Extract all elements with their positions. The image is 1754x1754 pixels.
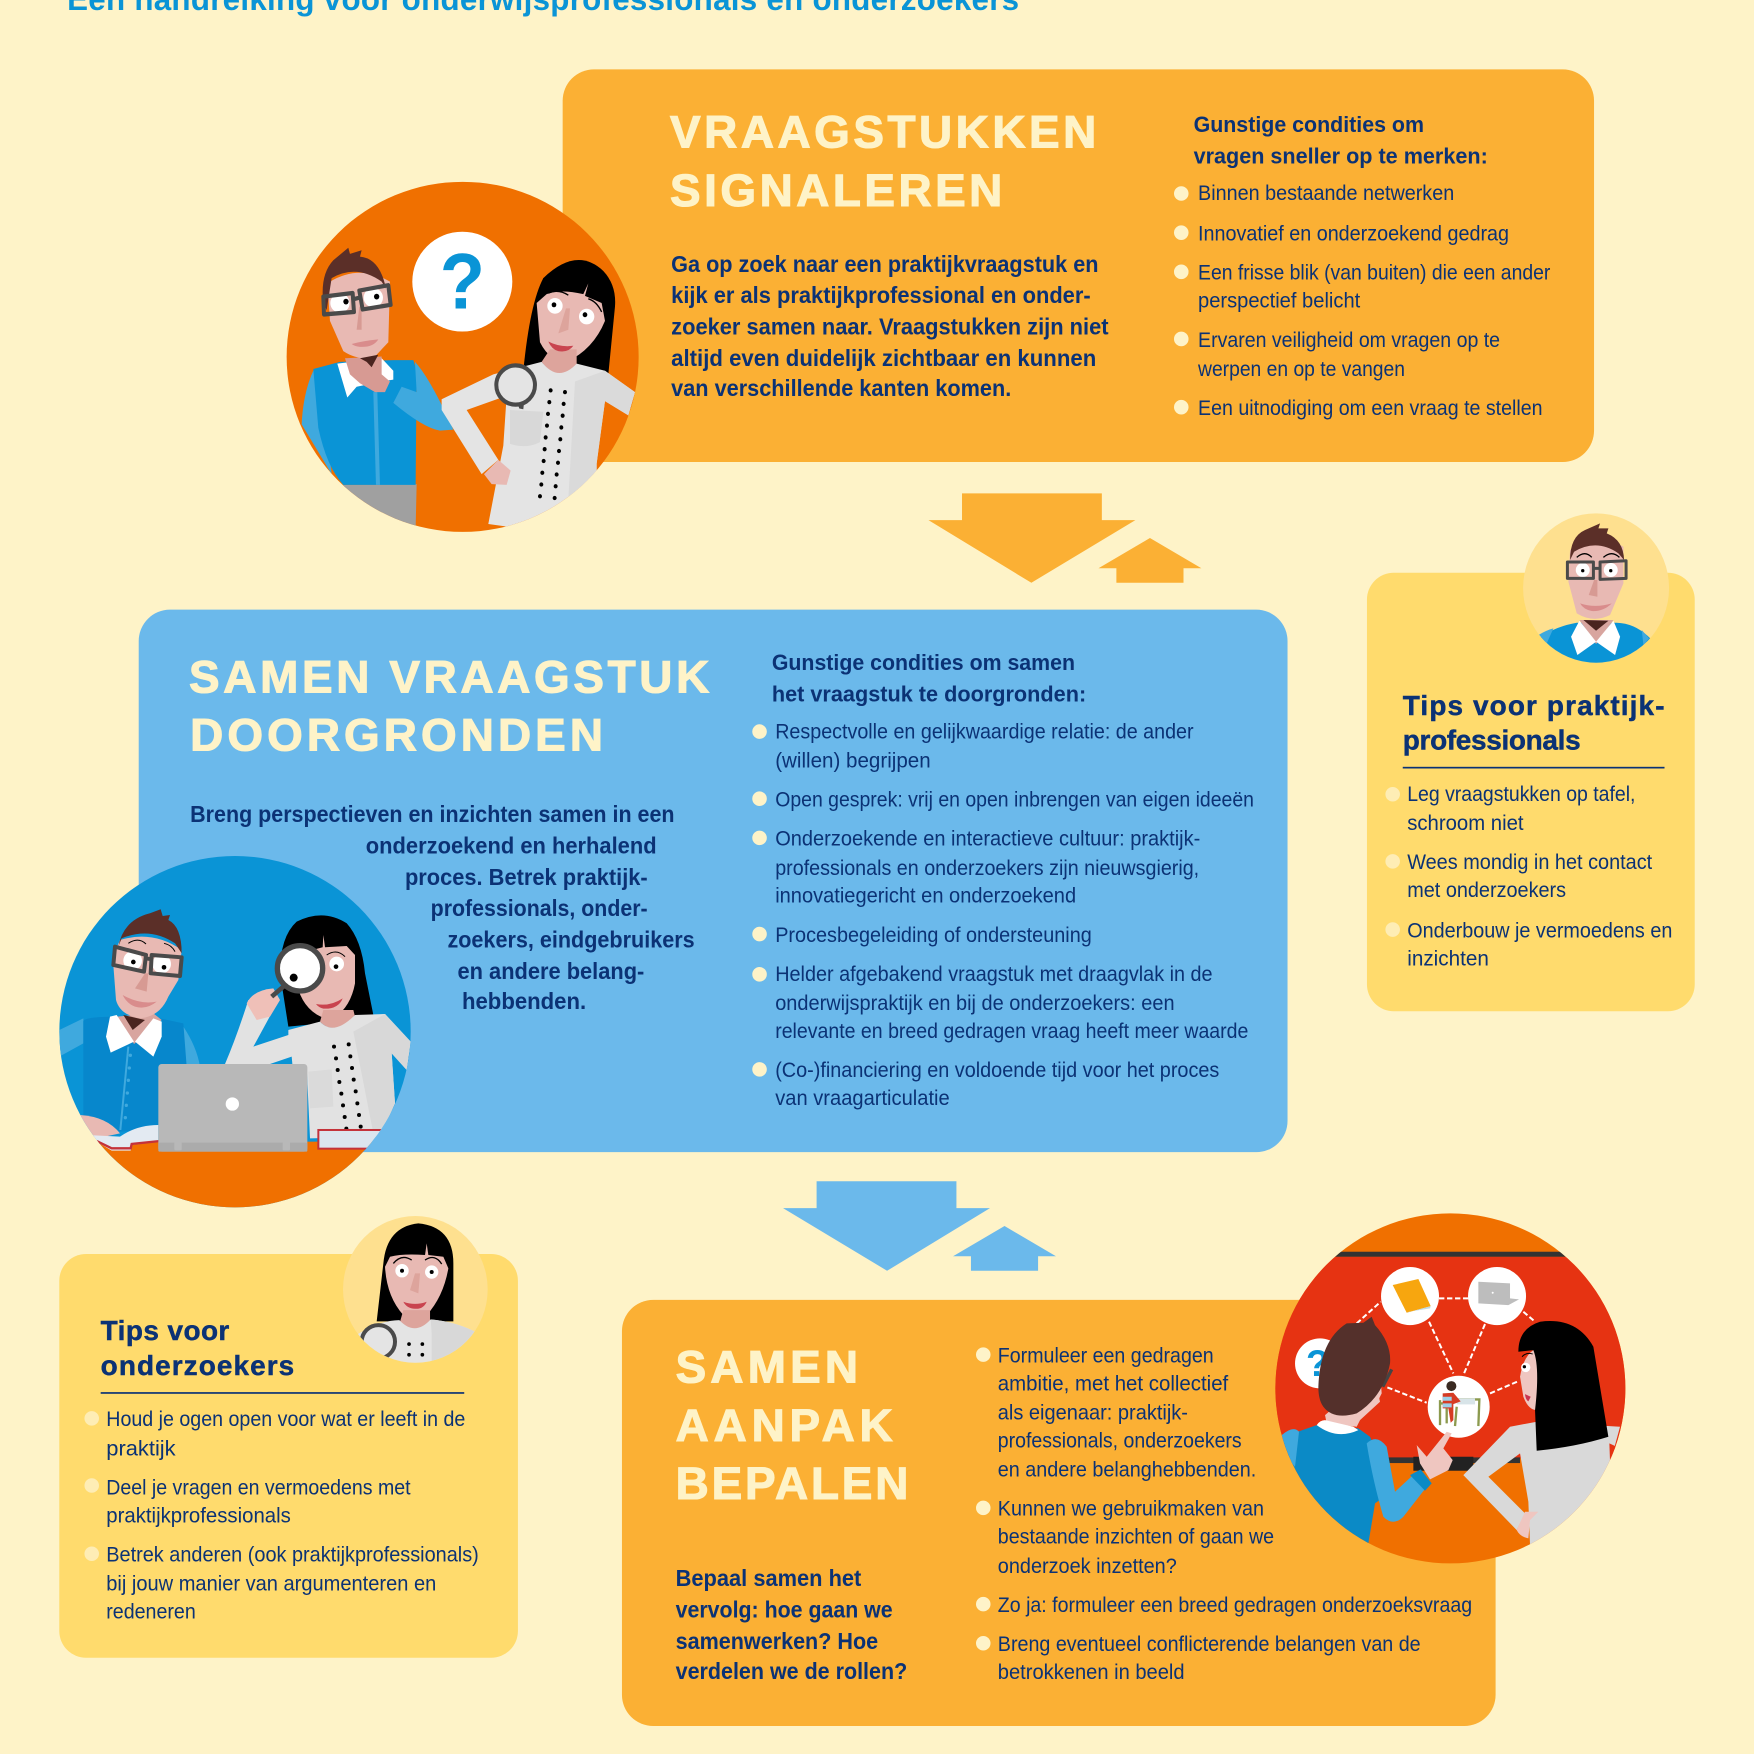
heading: onderzoekers xyxy=(101,1350,294,1381)
intro text xyxy=(671,251,1109,401)
icon: man portrait xyxy=(1523,513,1669,667)
tips list: redeneren xyxy=(106,1600,196,1624)
conditions list: relevante en breed gedragen vraag heeft meer waarde xyxy=(775,1019,1248,1043)
conditions list: onderzoek inzetten? xyxy=(998,1554,1177,1578)
arrow: orange down and up xyxy=(928,493,1201,583)
panel: tips voor onderzoekers xyxy=(59,1254,518,1658)
intro text: altijd even duidelijk zichtbaar en kunnen xyxy=(671,345,1096,371)
conditions list: Respectvolle en gelijkwaardige relatie: de ander xyxy=(775,719,1194,743)
tips list: Wees mondig in het contact xyxy=(1407,850,1652,874)
illustration: man and woman at laptop xyxy=(57,853,413,1212)
arrow: blue down and up xyxy=(783,1181,1056,1271)
conditions list: bestaande inzichten of gaan we xyxy=(998,1525,1274,1549)
conditions list: Helder afgebakend vraagstuk met draagvlak in de xyxy=(775,962,1213,986)
conditions list: (Co-)financiering en voldoende tijd voor het proces xyxy=(775,1058,1219,1082)
panel background xyxy=(563,69,1594,462)
intro text: Bepaal samen het xyxy=(676,1565,862,1591)
conditions list: als eigenaar: praktijk- xyxy=(998,1401,1188,1425)
illustration: man and woman with question: ? xyxy=(440,238,485,326)
conditions list xyxy=(976,1343,1472,1684)
heading xyxy=(1403,690,1665,755)
tips list: schroom niet xyxy=(1407,811,1524,835)
panel: tips voor praktijkprofessionals xyxy=(1367,573,1695,1011)
conditions list: (willen) begrijpen xyxy=(775,748,931,772)
conditions list: Een uitnodiging om een vraag te stellen xyxy=(1198,396,1543,420)
intro text: Breng perspectieven en inzichten samen in een xyxy=(190,801,675,827)
illustration: two people at whiteboard xyxy=(1273,1210,1630,1567)
intro text: vervolg: hoe gaan we xyxy=(676,1597,893,1623)
conditions list: Open gesprek: vrij en open inbrengen van eigen ideeën xyxy=(775,788,1254,812)
tips list: Houd je ogen open voor wat er leeft in de xyxy=(106,1407,465,1431)
tips list: met onderzoekers xyxy=(1407,878,1566,902)
intro text: kijk er als praktijkprofessional en onder- xyxy=(671,282,1091,308)
panel background xyxy=(1367,573,1695,1011)
conditions heading: Gunstige condities om samen xyxy=(772,650,1075,675)
tips list: inzichten xyxy=(1407,946,1489,970)
conditions list: professionals, onderzoekers xyxy=(998,1428,1242,1452)
conditions list: en andere belanghebbenden. xyxy=(998,1458,1256,1482)
tips list: bij jouw manier van argumenteren en xyxy=(106,1572,436,1596)
panel background xyxy=(139,610,1288,1152)
intro text: samenwerken? Hoe xyxy=(676,1628,878,1654)
illustration: two people at whiteboard: ? xyxy=(1306,1342,1329,1384)
conditions heading: vragen sneller op te merken: xyxy=(1194,143,1488,168)
intro text: en andere belang- xyxy=(458,958,644,984)
intro text: zoekers, eindgebruikers xyxy=(447,926,695,952)
tips list: Onderbouw je vermoedens en xyxy=(1407,918,1672,942)
conditions list: betrokkenen in beeld xyxy=(998,1660,1185,1684)
heading: BEPALEN xyxy=(676,1457,908,1509)
conditions heading xyxy=(1194,112,1488,168)
panel: vraagstukken signaleren xyxy=(563,69,1594,462)
conditions list: Een frisse blik (van buiten) die een ander xyxy=(1198,261,1550,285)
tips list: praktijk xyxy=(106,1436,176,1460)
intro text: verdelen we de rollen? xyxy=(676,1658,907,1684)
heading xyxy=(676,1341,908,1509)
conditions list: van vraagarticulatie xyxy=(775,1086,950,1110)
tips list xyxy=(84,1407,479,1624)
conditions list: innovatiegericht en onderzoekend xyxy=(775,884,1076,908)
panel background xyxy=(622,1300,1496,1726)
conditions heading: Gunstige condities om xyxy=(1194,112,1424,137)
intro text xyxy=(190,801,695,1014)
heading xyxy=(189,650,709,761)
heading: SAMEN xyxy=(676,1341,858,1393)
heading: DOORGRONDEN xyxy=(190,709,603,761)
conditions list: Kunnen we gebruikmaken van xyxy=(998,1497,1264,1521)
conditions list: ambitie, met het collectief xyxy=(998,1371,1228,1395)
conditions list: Zo ja: formuleer een breed gedragen onderzoeksvraag xyxy=(998,1593,1472,1617)
panel: samen vraagstuk doorgronden xyxy=(139,610,1288,1152)
heading: SIGNALEREN xyxy=(670,164,1002,216)
intro text: proces. Betrek praktijk- xyxy=(405,864,648,890)
conditions heading: het vraagstuk te doorgronden: xyxy=(772,681,1086,706)
illustration: man and woman with question xyxy=(280,175,647,538)
heading xyxy=(670,106,1096,216)
conditions list: Onderzoekende en interactieve cultuur: praktijk- xyxy=(775,827,1200,851)
heading: VRAAGSTUKKEN xyxy=(670,106,1096,158)
conditions list: Binnen bestaande netwerken xyxy=(1198,181,1454,205)
tips list: Betrek anderen (ook praktijkprofessionals) xyxy=(106,1543,479,1567)
heading xyxy=(101,1315,294,1381)
panel: samen aanpak bepalen xyxy=(622,1300,1496,1726)
intro text xyxy=(676,1565,907,1684)
heading: professionals xyxy=(1403,724,1581,755)
intro text: zoeker samen naar. Vraagstukken zijn niet xyxy=(671,313,1109,339)
tips list: Deel je vragen en vermoedens met xyxy=(106,1475,411,1499)
intro text: onderzoekend en herhalend xyxy=(366,833,657,859)
tips list xyxy=(1385,782,1672,970)
heading: Tips voor xyxy=(101,1315,229,1346)
icon: woman portrait xyxy=(343,1216,488,1367)
conditions list xyxy=(1174,181,1550,420)
conditions list: perspectief belicht xyxy=(1198,289,1360,313)
tips list: Leg vraagstukken op tafel, xyxy=(1407,782,1635,806)
conditions list: onderwijspraktijk en bij de onderzoekers: een xyxy=(775,991,1175,1015)
conditions list: Formuleer een gedragen xyxy=(998,1343,1214,1367)
conditions list xyxy=(752,719,1254,1110)
heading: AANPAK xyxy=(676,1399,893,1451)
conditions heading xyxy=(772,650,1086,706)
conditions list: Ervaren veiligheid om vragen op te xyxy=(1198,328,1500,352)
conditions list: Procesbegeleiding of ondersteuning xyxy=(775,923,1092,947)
intro text: Ga op zoek naar een praktijkvraagstuk en xyxy=(671,251,1098,277)
heading: SAMEN VRAAGSTUK xyxy=(189,650,709,702)
conditions list: werpen en op te vangen xyxy=(1197,357,1405,381)
intro text: hebbenden. xyxy=(462,988,586,1014)
conditions list: professionals en onderzoekers zijn nieuwsgierig, xyxy=(775,856,1199,880)
heading: Tips voor praktijk- xyxy=(1403,690,1665,721)
conditions list: Breng eventueel conflicterende belangen van de xyxy=(998,1632,1421,1656)
intro text: professionals, onder- xyxy=(431,895,648,921)
intro text: van verschillende kanten komen. xyxy=(671,375,1011,401)
panel background xyxy=(59,1254,518,1658)
conditions list: Innovatief en onderzoekend gedrag xyxy=(1198,222,1509,246)
tips list: praktijkprofessionals xyxy=(106,1503,291,1527)
